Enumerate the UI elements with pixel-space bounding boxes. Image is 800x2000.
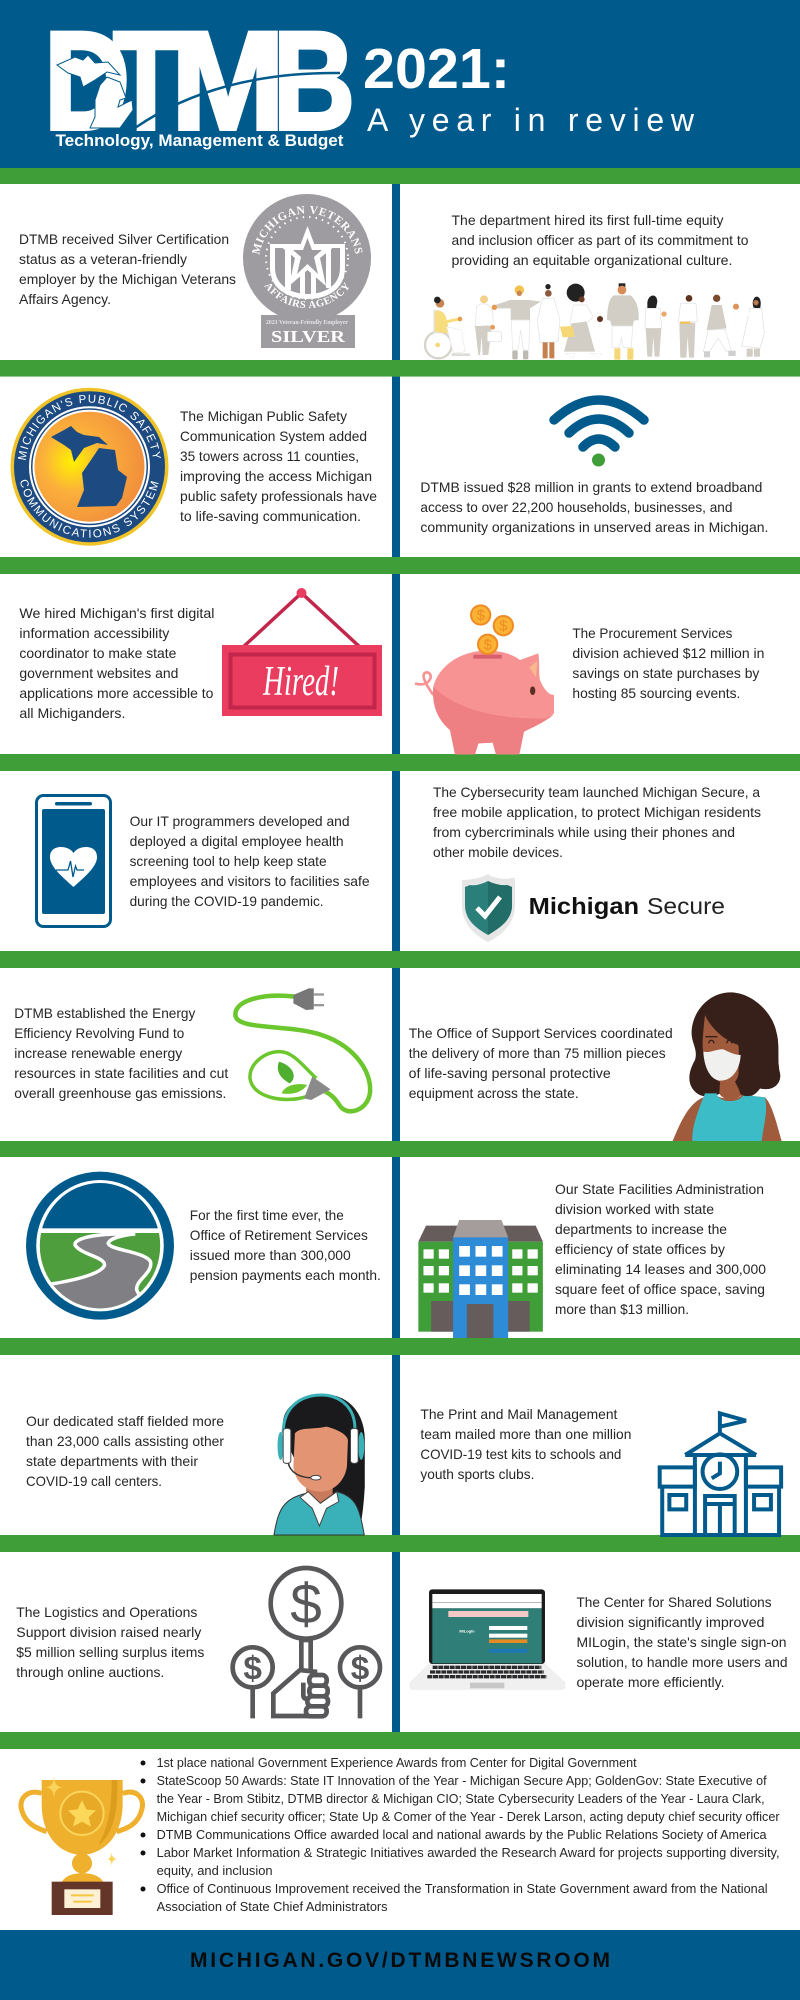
DTMB logo: B <box>273 2 355 159</box>
panel: veteran-friendly certification <box>19 194 371 348</box>
icon: veterans affairs silver badge: MICHIGAN VETERANS <box>252 206 362 255</box>
text: broadband <box>420 479 768 535</box>
text: awards list: Association of State Chief Administrators <box>157 1900 388 1914</box>
text: public safety towers: public safety professionals have <box>180 488 377 504</box>
panel: surplus auctions <box>0 1552 392 1732</box>
text: awards list <box>140 1756 780 1914</box>
text: procurement: The Procurement Services <box>572 625 732 641</box>
hijab person <box>645 295 667 357</box>
panel: personal protective equipment <box>400 968 800 1141</box>
text: awards list: equity, and inclusion <box>157 1864 273 1878</box>
logotype: Michigan Secure: Secure <box>647 893 725 919</box>
panel: procurement savings <box>400 574 800 754</box>
text: PPE: The Office of Support Services coordinated <box>409 1025 673 1041</box>
white gown person <box>733 297 764 357</box>
text: awards list: DTMB Communications Office awarded local and national awards by the Public Relations Society of America <box>157 1828 767 1842</box>
text: test kits: COVID-19 test kits to schools and <box>420 1446 621 1462</box>
text: energy fund: DTMB established the Energy <box>14 1005 195 1021</box>
text: awards list: Office of Continuous Improvement received the Transformation in State Government award from the National <box>157 1882 768 1896</box>
panel: state facilities <box>400 1157 800 1338</box>
footer <box>0 1930 800 2000</box>
icon: laptop with MILogin screen: MILogin <box>459 1629 475 1634</box>
panel: health screening tool <box>0 771 392 951</box>
text: accessibility coordinator: government websites and <box>19 665 178 681</box>
icon: gold trophy <box>21 1776 143 1915</box>
text: equity officer: The department hired its first full-time equity <box>452 212 724 228</box>
text: accessibility coordinator <box>19 605 214 721</box>
text: silver certification <box>19 231 236 307</box>
text: public safety towers <box>180 408 377 524</box>
text: cybersecurity <box>433 784 761 860</box>
text: public safety towers: The Michigan Public Safety <box>180 408 347 424</box>
icon: piggy bank: $ <box>499 619 507 635</box>
text: public safety towers: Communication System added <box>180 428 367 444</box>
text: public safety towers: to life-saving communication. <box>180 508 361 524</box>
text: equity officer: providing an equitable organizational culture. <box>452 252 732 268</box>
text: awards list: StateScoop 50 Awards: State IT Innovation of the Year - Michigan Secure App; GoldenGov: State Executive of <box>157 1774 767 1788</box>
text: MILogin <box>576 1594 788 1690</box>
text: silver certification: employer by the Michigan Veterans <box>19 271 236 287</box>
icon: plug and light bulb <box>235 988 370 1111</box>
text: cybersecurity: other mobile devices. <box>433 844 563 860</box>
icon: hired sign <box>222 588 382 716</box>
text: awards list: Michigan chief security officer; State Up & Comer of the Year - Derek Larson, acting deputy chief security officer <box>157 1810 780 1824</box>
panel: awards <box>0 1749 800 1930</box>
text: PPE: equipment across the state. <box>409 1085 579 1101</box>
text: employee health: employees and visitors to facilities safe <box>130 873 370 889</box>
text: auctions <box>16 1604 204 1680</box>
text: test kits: team mailed more than one million <box>420 1426 631 1442</box>
panel: public safety communication <box>0 376 392 546</box>
icon: office building <box>418 1220 543 1338</box>
DTMB logo: Technology, Management & Budget <box>56 132 344 150</box>
text: call centers: COVID-19 call centers. <box>26 1473 162 1489</box>
text: procurement: savings on state purchases by <box>572 665 759 681</box>
tall person <box>607 283 639 360</box>
text: energy fund: Efficiency Revolving Fund to <box>14 1025 185 1041</box>
icon: hand with dollar auction paddles: $ <box>351 1650 370 1687</box>
blonde person <box>475 295 501 355</box>
text: procurement <box>572 625 764 701</box>
text: state facilities: square feet of office space, saving <box>555 1281 765 1297</box>
text: energy fund <box>14 1005 228 1101</box>
icon: call center agent <box>274 1394 365 1535</box>
text: PPE: the delivery of more than 75 million pieces <box>409 1045 666 1061</box>
text: procurement: hosting 85 sourcing events. <box>572 685 740 701</box>
panel: COVID-19 test kits <box>400 1355 800 1535</box>
icon: wifi <box>554 400 644 466</box>
icon: woman with mask <box>673 992 782 1141</box>
text: employee health <box>130 813 370 909</box>
text: state facilities: Our State Facilities Administration <box>555 1181 764 1197</box>
text: auctions: Support division raised nearly <box>16 1624 201 1640</box>
icon: veterans affairs silver badge: SILVER <box>271 327 346 346</box>
DTMB logo <box>44 2 355 159</box>
text: pension payments: pension payments each month. <box>190 1267 381 1283</box>
text: broadband: DTMB issued $28 million in grants to extend broadband <box>420 479 762 495</box>
panel: MILogin <box>400 1552 800 1732</box>
text: state facilities: departments to increase the <box>555 1221 727 1237</box>
text: MILogin: The Center for Shared Solutions <box>576 1594 772 1610</box>
text: auctions: $5 million selling surplus items <box>16 1644 204 1660</box>
text: equity officer <box>452 212 749 268</box>
icon: Michigan Secure shield <box>462 874 515 942</box>
icon: veterans affairs silver badge: AFFAIRS AGENCY <box>264 282 350 308</box>
title: 2021: 2021: <box>363 37 510 101</box>
dress person <box>537 284 560 358</box>
text: silver certification: DTMB received Silver Certification <box>19 231 229 247</box>
text: cybersecurity: from cybercriminals while using their phones and <box>433 824 735 840</box>
icon: hand with dollar auction paddles: $ <box>290 1573 322 1636</box>
icon: hand with dollar auction paddles: $ <box>243 1650 262 1687</box>
afro person <box>560 284 603 358</box>
text: energy fund: increase renewable energy <box>14 1045 182 1061</box>
man with tie <box>678 295 697 358</box>
text: accessibility coordinator: all Michiganders. <box>19 705 125 721</box>
text: broadband: access to over 22,200 households, businesses, and <box>420 499 732 515</box>
text: accessibility coordinator: applications more accessible to <box>19 685 214 701</box>
text: awards list: the Year - Brom Stibitz, DTMB director & Michigan CIO; State Cybersecurity Leaders of the Year - Laura Clark, <box>157 1792 765 1806</box>
panel: broadband grants <box>400 377 800 557</box>
text: state facilities <box>555 1181 766 1317</box>
text: awards list: 1st place national Government Experience Awards from Center for Digital Government <box>157 1756 637 1770</box>
text: call centers: Our dedicated staff fielded more <box>26 1413 224 1429</box>
text: call centers: than 23,000 calls assisting other <box>26 1433 224 1449</box>
icon: piggy bank: $ <box>477 608 485 624</box>
text: MILogin: operate more efficiently. <box>576 1674 724 1690</box>
text: equity officer: and inclusion officer as part of its commitment to <box>452 232 749 248</box>
text: pension payments <box>190 1207 381 1283</box>
icon: laptop with MILogin screen <box>410 1589 565 1689</box>
panel: digital accessibility coordinator <box>0 574 392 754</box>
icon: piggy bank <box>415 605 554 754</box>
icon: public safety communications seal: MICHIGAN'S PUBLIC SAFETY <box>18 394 161 460</box>
text: cybersecurity: free mobile application, to protect Michigan residents <box>433 804 761 820</box>
text: procurement: division achieved $12 million in <box>572 645 764 661</box>
text: test kits <box>420 1406 631 1482</box>
text: auctions: through online auctions. <box>16 1664 164 1680</box>
icon: phone with heart <box>36 796 110 926</box>
text: MILogin: division significantly improved <box>576 1614 764 1630</box>
text: broadband: community organizations in unserved areas in Michigan. <box>420 519 768 535</box>
panel: equity and inclusion officer <box>400 184 800 360</box>
text: call centers <box>26 1413 224 1489</box>
text: public safety towers: 35 towers across 11 counties, <box>180 448 359 464</box>
icon: hand with dollar auction paddles <box>233 1568 380 1718</box>
text: PPE: of life-saving personal protective <box>409 1065 611 1081</box>
text: employee health: Our IT programmers developed and <box>130 813 350 829</box>
text: PPE <box>409 1025 673 1101</box>
text: MILogin: solution, to handle more users and <box>576 1654 788 1670</box>
DTMB logo: T <box>113 2 179 159</box>
text: silver certification: status as a veteran-friendly <box>19 251 187 267</box>
DTMB logo: M <box>171 2 285 159</box>
panel: call centers <box>0 1355 392 1535</box>
text: pension payments: Office of Retirement Services <box>190 1227 368 1243</box>
icon: retirement services road seal <box>26 1172 174 1320</box>
text: pension payments: issued more than 300,000 <box>190 1247 351 1263</box>
text: state facilities: eliminating 14 leases and 300,000 <box>555 1261 766 1277</box>
icon: veterans affairs silver badge: 2021 Veteran-Friendly Employer <box>266 320 348 326</box>
text: auctions: The Logistics and Operations <box>16 1604 197 1620</box>
text: energy fund: resources in state facilities and cut <box>14 1065 228 1081</box>
text: accessibility coordinator: coordinator to make state <box>19 645 177 661</box>
text: employee health: deployed a digital employee health <box>130 833 344 849</box>
panel: pension payments <box>26 1172 380 1320</box>
text: call centers: state departments with their <box>26 1453 198 1469</box>
walking person <box>703 295 736 357</box>
panel: energy efficiency fund <box>0 968 392 1141</box>
text: MILogin: MILogin, the state's single sign-on <box>576 1634 786 1650</box>
text: accessibility coordinator: We hired Michigan's first digital <box>19 605 214 621</box>
text: employee health: screening tool to help keep state <box>130 853 327 869</box>
text: employee health: during the COVID-19 pandemic. <box>130 893 324 909</box>
logotype: Michigan Secure: Michigan <box>529 893 639 919</box>
footer link text: MICHIGAN.GOV/DTMBNEWSROOM <box>190 1949 610 1972</box>
header banner <box>0 0 800 168</box>
text: state facilities: division worked with state <box>555 1201 714 1217</box>
icon: public safety communications seal <box>10 388 168 546</box>
text: pension payments: For the first time ever, the <box>190 1207 344 1223</box>
text: energy fund: overall greenhouse gas emissions. <box>14 1085 226 1101</box>
subtitle: A year in review <box>367 102 695 138</box>
icon: public safety communications seal: COMMUNICATIONS SYSTEM <box>20 480 159 538</box>
turban person <box>492 285 541 359</box>
icon: hired sign: Hired! <box>262 659 339 705</box>
text: test kits: youth sports clubs. <box>420 1466 534 1482</box>
text: state facilities: efficiency of state offices by <box>555 1241 725 1257</box>
icon: school building <box>660 1413 781 1535</box>
wheelchair person <box>425 297 470 358</box>
text: accessibility coordinator: information accessibility <box>19 625 169 641</box>
panel: Michigan Secure <box>400 771 800 951</box>
text: awards list: Labor Market Information & Strategic Initiatives awarded the Research Award for projects supporting diversity, <box>157 1846 780 1860</box>
text: state facilities: more than $13 million. <box>555 1301 689 1317</box>
icon: piggy bank: $ <box>484 637 492 653</box>
icon: veterans affairs silver badge <box>243 194 371 348</box>
text: cybersecurity: The Cybersecurity team launched Michigan Secure, a <box>433 784 760 800</box>
DTMB logo: D <box>44 2 130 159</box>
text: public safety towers: improving the access Michigan <box>180 468 372 484</box>
text: test kits: The Print and Mail Management <box>420 1406 618 1422</box>
icon: group of diverse people <box>425 283 764 360</box>
text: silver certification: Affairs Agency. <box>19 291 111 307</box>
logotype: Michigan Secure <box>529 893 725 919</box>
